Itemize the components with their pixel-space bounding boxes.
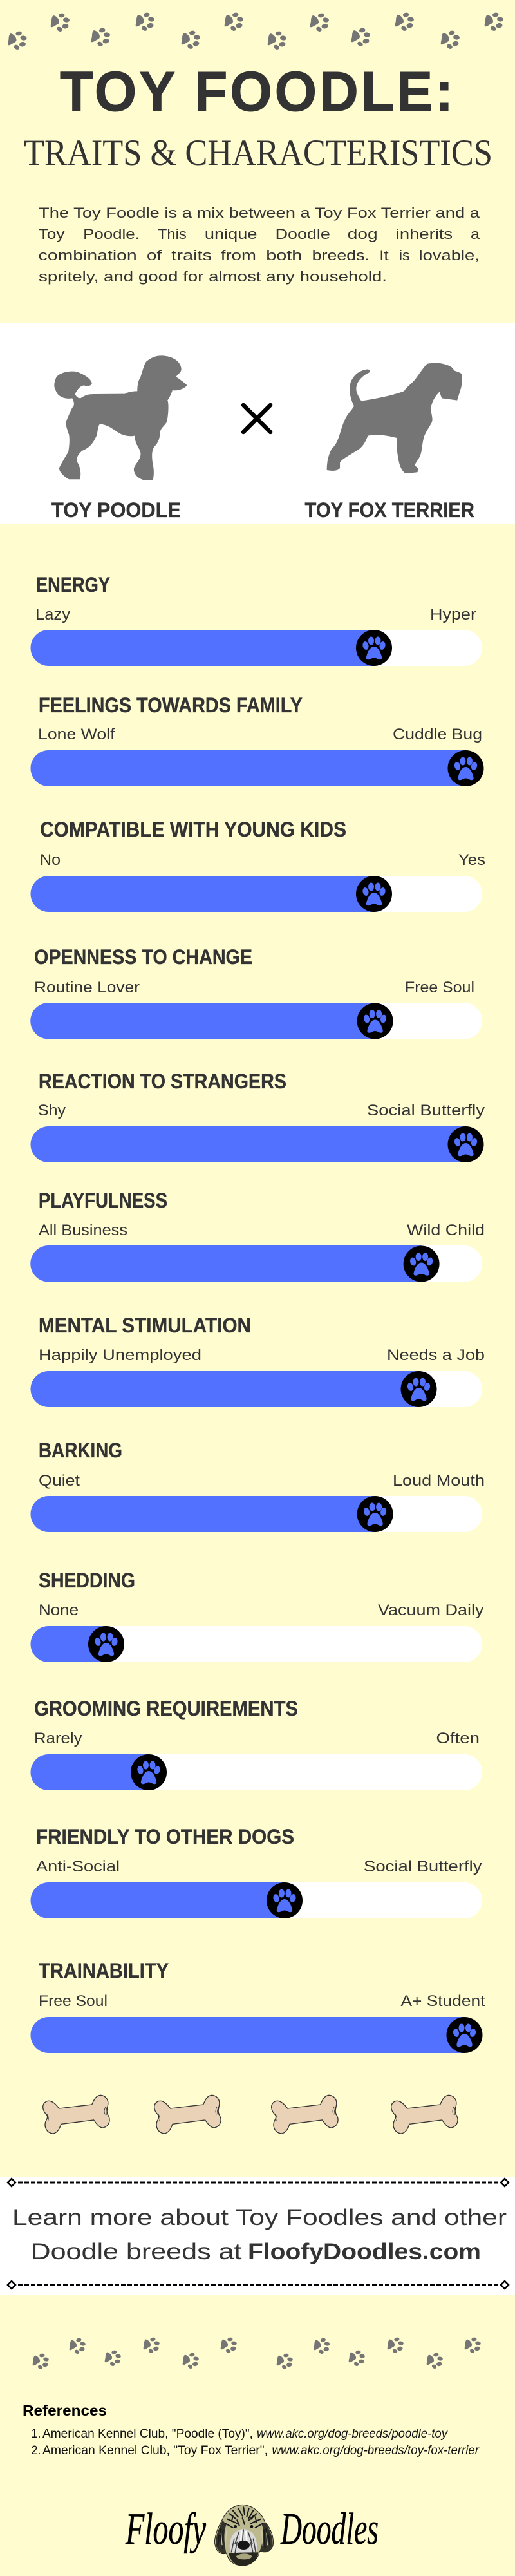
icon: cross mark bbox=[243, 405, 270, 432]
intro paragraph: Poodle. bbox=[83, 226, 140, 242]
references bbox=[23, 2402, 480, 2458]
paw marker bbox=[357, 1003, 393, 1039]
bar fill bbox=[31, 1126, 466, 1162]
heading: ENERGY bbox=[36, 573, 110, 596]
intro paragraph: inherits bbox=[396, 226, 453, 242]
bar track bbox=[31, 1371, 482, 1407]
bar fill bbox=[31, 876, 374, 912]
bar track bbox=[31, 1245, 482, 1282]
scale label low: Rarely bbox=[34, 1730, 82, 1747]
intro paragraph: from bbox=[221, 247, 256, 263]
reference one: www.akc.org/dog-breeds/poodle-toy bbox=[257, 2427, 448, 2441]
bar fill bbox=[31, 1882, 285, 1918]
reference one bbox=[31, 2427, 448, 2441]
panel: parent breeds bbox=[0, 323, 515, 524]
icon: toy poodle silhouette bbox=[54, 355, 187, 480]
icon row: dog bones bbox=[43, 2095, 458, 2134]
paw marker bbox=[447, 2017, 483, 2053]
scale label high: Social Butterfly bbox=[364, 1858, 482, 1875]
heading: FRIENDLY TO OTHER DOGS bbox=[36, 1825, 294, 1848]
bar track bbox=[31, 1754, 482, 1790]
bar track bbox=[31, 876, 482, 912]
intro paragraph: The Toy Foodle is a mix between a Toy Fox Terrier and a bbox=[39, 205, 480, 221]
panel: grooming requirements bbox=[31, 1697, 482, 1790]
intro paragraph: This bbox=[158, 226, 187, 242]
scale label high: Needs a Job bbox=[387, 1347, 485, 1364]
heading: MENTAL STIMULATION bbox=[39, 1314, 251, 1337]
intro paragraph: breeds. bbox=[312, 247, 370, 263]
heading: PLAYFULNESS bbox=[39, 1189, 167, 1212]
intro paragraph: of bbox=[147, 247, 162, 263]
reference one: 1. bbox=[31, 2427, 41, 2441]
references heading: References bbox=[23, 2402, 107, 2419]
scale label high: Hyper bbox=[430, 606, 476, 623]
icon: toy fox terrier silhouette bbox=[327, 363, 462, 473]
reference two bbox=[31, 2444, 480, 2458]
heading: FEELINGS TOWARDS FAMILY bbox=[39, 694, 303, 717]
bar track bbox=[31, 1882, 482, 1918]
bar fill bbox=[31, 1626, 106, 1662]
scale label low: Anti-Social bbox=[36, 1858, 120, 1875]
reference two: www.akc.org/dog-breeds/toy-fox-terrier bbox=[272, 2444, 480, 2458]
scale label high: Vacuum Daily bbox=[378, 1602, 484, 1619]
paw marker bbox=[400, 1371, 436, 1407]
website link: FloofyDoodles.com bbox=[248, 2239, 481, 2264]
bar track bbox=[31, 750, 482, 786]
call to action line two: Doodle breeds at bbox=[31, 2239, 242, 2264]
heading: SHEDDING bbox=[39, 1569, 135, 1592]
scale label low: Routine Lover bbox=[34, 979, 140, 996]
bar fill bbox=[31, 630, 374, 666]
intro paragraph: a bbox=[471, 226, 480, 242]
top paw print row bbox=[8, 12, 504, 50]
logo: Floofy Doodles bbox=[125, 2505, 379, 2566]
paw marker bbox=[356, 876, 392, 912]
intro paragraph: dog bbox=[348, 226, 378, 242]
scale label low: Quiet bbox=[39, 1472, 80, 1490]
scale label high: Cuddle Bug bbox=[393, 726, 482, 743]
heading: COMPATIBLE WITH YOUNG KIDS bbox=[40, 818, 346, 841]
bar fill bbox=[30, 1003, 375, 1039]
reference two: American Kennel Club, "Toy Fox Terrier", bbox=[42, 2444, 268, 2458]
panel: trainability bbox=[31, 1959, 485, 2053]
paw marker bbox=[448, 750, 484, 786]
bar fill bbox=[31, 750, 466, 786]
bar track bbox=[31, 2017, 482, 2053]
intro paragraph: It bbox=[379, 247, 389, 263]
intro paragraph: combination bbox=[39, 247, 137, 263]
bar fill bbox=[30, 1245, 422, 1282]
scale label low: None bbox=[39, 1602, 79, 1619]
panel: feelings towards family bbox=[31, 694, 484, 786]
scale label high: A+ Student bbox=[400, 1993, 485, 2010]
bar track bbox=[31, 630, 482, 666]
bar track bbox=[31, 1003, 482, 1039]
logo word: Doodles: Doodles bbox=[280, 2505, 379, 2554]
panel: playfulness bbox=[30, 1189, 485, 1282]
intro paragraph: both bbox=[266, 247, 302, 263]
scale label high: Loud Mouth bbox=[393, 1472, 485, 1490]
panel: friendly to other dogs bbox=[31, 1825, 482, 1918]
scale label high: Social Butterfly bbox=[367, 1102, 485, 1119]
paw marker bbox=[448, 1126, 484, 1162]
panel: mental stimulation bbox=[31, 1314, 485, 1407]
icon: doodle dog head bbox=[214, 2505, 273, 2566]
bar track bbox=[31, 1496, 482, 1532]
label: toy fox terrier: TOY FOX TERRIER bbox=[305, 498, 474, 522]
scale label low: Lone Wolf bbox=[38, 726, 115, 743]
heading: BARKING bbox=[39, 1439, 122, 1462]
reference two: 2. bbox=[31, 2444, 41, 2458]
title: TOY FOODLE: bbox=[60, 61, 456, 123]
panel: reaction to strangers bbox=[31, 1070, 485, 1162]
heading: REACTION TO STRANGERS bbox=[39, 1070, 286, 1093]
call to action line one: Learn more about Toy Foodles and other bbox=[12, 2205, 507, 2230]
scale label high: Yes bbox=[458, 851, 485, 869]
panel: shedding bbox=[31, 1569, 484, 1662]
scale label high: Wild Child bbox=[407, 1222, 485, 1239]
paw marker bbox=[88, 1626, 124, 1662]
scale label low: All Business bbox=[39, 1222, 127, 1239]
intro paragraph: Doodle bbox=[276, 226, 330, 242]
intro paragraph bbox=[39, 205, 480, 285]
scale label high: Often bbox=[436, 1730, 480, 1747]
bar fill bbox=[31, 2017, 465, 2053]
paw marker bbox=[356, 630, 392, 666]
paw marker bbox=[131, 1754, 167, 1790]
intro paragraph: lovable, bbox=[418, 247, 480, 263]
heading: GROOMING REQUIREMENTS bbox=[34, 1697, 298, 1720]
logo word: Floofy: Floofy bbox=[125, 2505, 207, 2554]
bar fill bbox=[31, 1496, 375, 1532]
intro paragraph: Toy bbox=[39, 226, 65, 242]
heading: OPENNESS TO CHANGE bbox=[34, 945, 252, 969]
bar track bbox=[31, 1626, 482, 1662]
scale label low: Lazy bbox=[35, 606, 70, 623]
intro paragraph: spritely, and good for almost any household. bbox=[39, 269, 387, 285]
intro paragraph: unique bbox=[205, 226, 258, 242]
scale label low: No bbox=[40, 851, 61, 869]
paw marker bbox=[404, 1245, 440, 1282]
bottom paw print row bbox=[33, 2337, 481, 2370]
paw marker bbox=[267, 1882, 303, 1918]
intro paragraph: is bbox=[399, 247, 410, 263]
label: toy poodle: TOY POODLE bbox=[52, 498, 181, 522]
scale label low: Free Soul bbox=[39, 1993, 108, 2010]
bar fill bbox=[31, 1754, 149, 1790]
panel: call to action bbox=[0, 2177, 515, 2295]
scale label low: Happily Unemployed bbox=[39, 1347, 201, 1364]
scale label high: Free Soul bbox=[405, 979, 474, 996]
reference one: American Kennel Club, "Poodle (Toy)", bbox=[42, 2427, 253, 2441]
panel: barking bbox=[31, 1439, 485, 1532]
heading: TRAINABILITY bbox=[39, 1959, 169, 1982]
paw marker bbox=[357, 1496, 393, 1532]
panel: compatible with young kids bbox=[31, 818, 485, 912]
bar track bbox=[31, 1126, 482, 1162]
bar fill bbox=[31, 1371, 419, 1407]
intro paragraph: traits bbox=[171, 247, 212, 263]
panel: energy bbox=[31, 573, 482, 666]
scale label low: Shy bbox=[38, 1102, 66, 1119]
panel: openness to change bbox=[30, 945, 482, 1039]
